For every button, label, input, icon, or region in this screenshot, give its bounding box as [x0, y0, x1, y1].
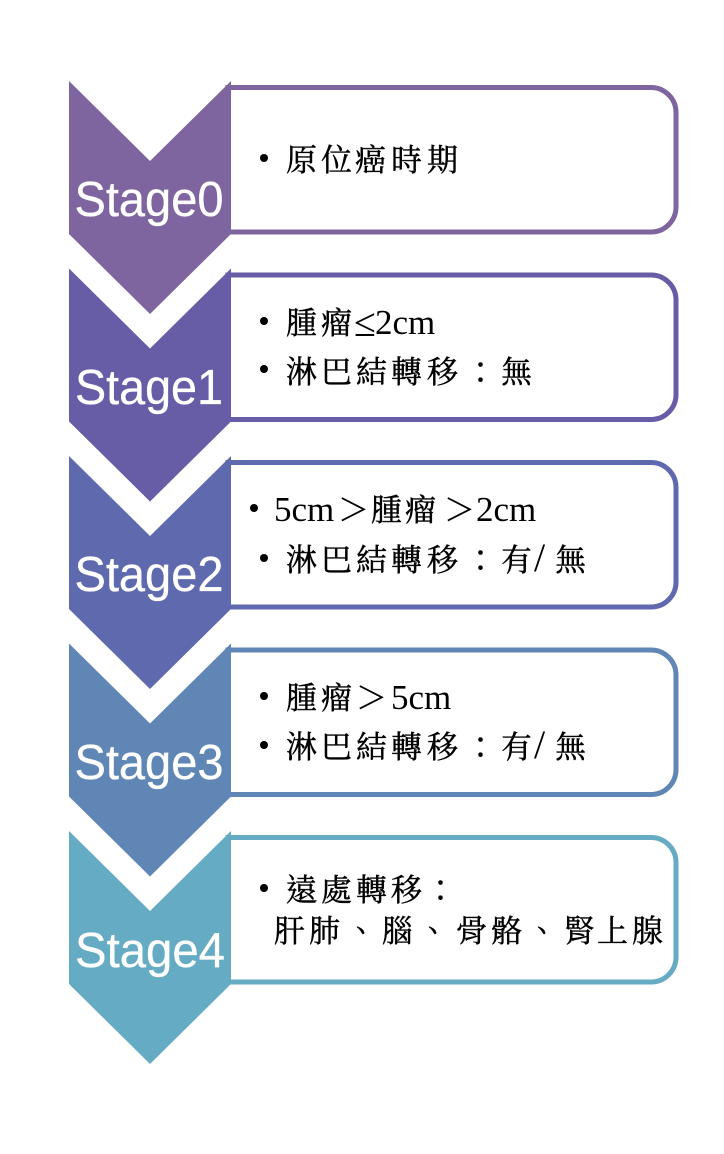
bullet list: stage 4: 遠處轉移：	[286, 873, 456, 908]
label: Stage1: Stage1	[75, 361, 223, 415]
bullet list: stage 3: 5cm	[391, 678, 451, 717]
label: Stage2: Stage2	[74, 548, 224, 602]
chevron: stage 2	[69, 456, 231, 689]
bullet list: stage 4	[260, 873, 663, 949]
chevron: stage 1	[69, 268, 231, 502]
chevron: stage 4	[69, 831, 231, 1064]
bullet list: stage 0: 原位癌時期	[286, 143, 458, 178]
bullet list: stage 3: 腫瘤＞	[286, 681, 387, 716]
label: Stage0: Stage0	[74, 173, 224, 227]
label: Stage4: Stage4	[75, 924, 225, 978]
panel: stage 2	[228, 462, 676, 607]
panel: stage 4	[228, 838, 676, 982]
bullet list: stage 2: 淋巴結轉移：有	[286, 543, 532, 578]
label: Stage3: Stage3	[74, 736, 224, 790]
bullet list: stage 3	[260, 678, 586, 767]
chevron: stage 0	[69, 81, 231, 314]
bullet list: stage 2: 無	[555, 543, 586, 578]
bullet list: stage 2: /	[534, 535, 546, 580]
bullet list: stage 1: 淋巴結轉移：無	[286, 355, 532, 390]
bullet list: stage 4: 肝肺、腦、骨骼、腎上腺	[274, 914, 663, 949]
bullet list: stage 2: 5cm	[274, 490, 334, 529]
panel: stage 3	[228, 650, 676, 794]
panel: stage 1	[228, 275, 676, 420]
bullet list: stage 2	[250, 490, 586, 580]
bullet list: stage 3: 無	[555, 730, 586, 765]
chevron: stage 3	[69, 644, 231, 876]
bullet list: stage 1: ≤	[354, 300, 376, 345]
bullet list: stage 1: 腫瘤	[286, 306, 352, 341]
panel: stage 0	[228, 88, 676, 232]
bullet list: stage 2: 2cm	[476, 490, 536, 529]
bullet list: stage 3: /	[534, 722, 546, 767]
bullet list: stage 2: ＞腫瘤＞	[338, 493, 475, 528]
bullet list: stage 1: 2cm	[375, 303, 435, 342]
bullet list: stage 3: 淋巴結轉移：有	[286, 730, 532, 765]
bullet list: stage 1	[260, 300, 532, 390]
